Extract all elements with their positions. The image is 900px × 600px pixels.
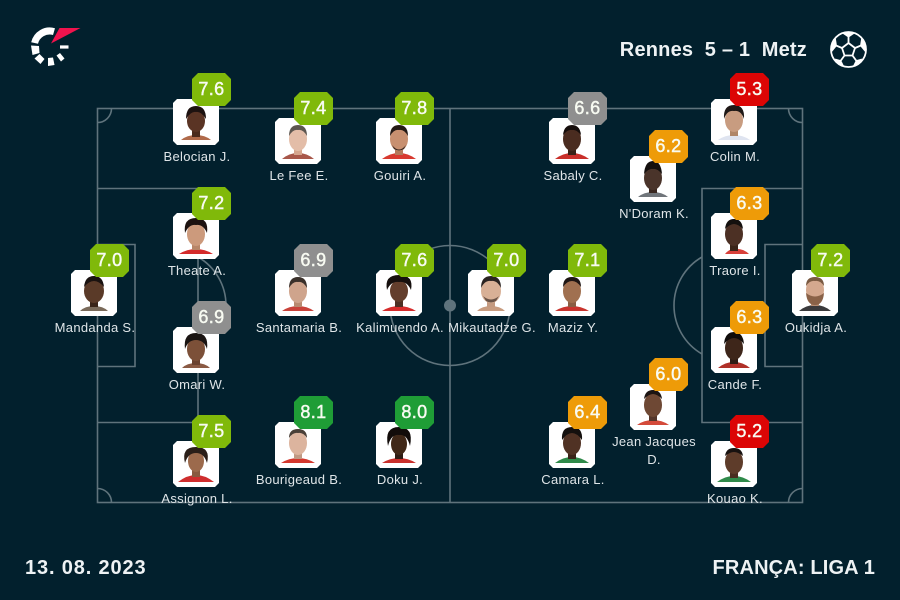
text: Santamaria B. — [256, 320, 342, 335]
player: Traore I. — [709, 187, 769, 278]
text: Assignon L. — [161, 491, 233, 506]
player: Assignon L. — [161, 415, 233, 506]
text: 6.6 — [574, 98, 601, 118]
player: Kouao K. — [707, 415, 769, 506]
text: 6.2 — [655, 136, 682, 156]
player: Gouiri A. — [374, 92, 434, 183]
text: 5.3 — [736, 79, 763, 99]
text: 6.0 — [655, 364, 682, 384]
text: Oukidja A. — [785, 320, 847, 335]
player: Mikautadze G. — [448, 244, 536, 335]
text: Colin M. — [710, 149, 760, 164]
text: 6.3 — [736, 307, 763, 327]
match date: 13. 08. 2023 — [25, 557, 146, 579]
text: 5.2 — [736, 421, 763, 441]
text: Kouao K. — [707, 491, 763, 506]
text: Le Fee E. — [269, 168, 329, 183]
player: Belocian J. — [164, 73, 231, 164]
text: 8.0 — [401, 402, 428, 422]
text: Doku J. — [377, 472, 423, 487]
text: Traore I. — [709, 263, 761, 278]
text: N'Doram K. — [619, 206, 689, 221]
text: Kalimuendo A. — [356, 320, 444, 335]
text: Mikautadze G. — [448, 320, 536, 335]
player: Bourigeaud B. — [256, 396, 342, 487]
logo — [31, 27, 80, 66]
player: Mandanda S. — [55, 244, 135, 335]
player: Theate A. — [168, 187, 231, 278]
text: Maziz Y. — [548, 320, 598, 335]
player: Doku J. — [376, 396, 434, 487]
text: D. — [647, 452, 661, 467]
player: Cande F. — [708, 301, 769, 392]
player: Le Fee E. — [269, 92, 333, 183]
text: 7.6 — [401, 250, 428, 270]
player: Omari W. — [169, 301, 231, 392]
text: Omari W. — [169, 377, 225, 392]
match score heading: Rennes 5 – 1 Metz — [620, 39, 807, 61]
text: 7.0 — [96, 250, 123, 270]
player: Kalimuendo A. — [356, 244, 444, 335]
text: 7.2 — [817, 250, 844, 270]
player: Oukidja A. — [785, 244, 850, 335]
text: Jean Jacques — [612, 434, 696, 449]
text: 7.0 — [493, 250, 520, 270]
text: Theate A. — [168, 263, 226, 278]
text: 7.6 — [198, 79, 225, 99]
player: Jean Jacques D. — [612, 358, 696, 467]
icon: football — [830, 31, 867, 68]
player: Sabaly C. — [543, 92, 607, 183]
text: 6.3 — [736, 193, 763, 213]
text: 6.9 — [198, 307, 225, 327]
text: 7.1 — [574, 250, 601, 270]
text: 6.9 — [300, 250, 327, 270]
text: 7.8 — [401, 98, 428, 118]
text: Cande F. — [708, 377, 762, 392]
text: Sabaly C. — [543, 168, 603, 183]
player: Santamaria B. — [256, 244, 342, 335]
text: 6.4 — [574, 402, 601, 422]
player: Camara L. — [541, 396, 607, 487]
text: Bourigeaud B. — [256, 472, 342, 487]
text: Belocian J. — [164, 149, 230, 164]
player: N'Doram K. — [619, 130, 689, 221]
text: 7.5 — [198, 421, 225, 441]
text: 8.1 — [300, 402, 327, 422]
text: Gouiri A. — [374, 168, 426, 183]
text: 7.4 — [300, 98, 327, 118]
player: Colin M. — [710, 73, 769, 164]
text: Mandanda S. — [55, 320, 135, 335]
competition name: FRANÇA: LIGA 1 — [713, 557, 875, 579]
player: Maziz Y. — [548, 244, 607, 335]
text: Camara L. — [541, 472, 605, 487]
text: 7.2 — [198, 193, 225, 213]
